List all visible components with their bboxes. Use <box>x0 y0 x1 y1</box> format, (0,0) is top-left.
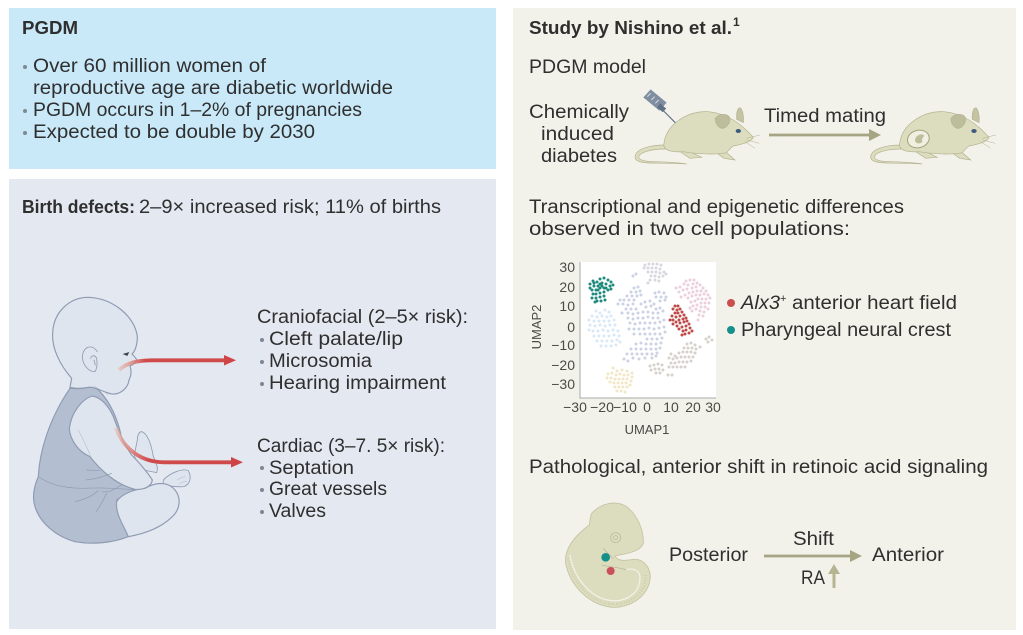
label: chemically induced diabetes: Chemically <box>529 102 630 123</box>
cluster: red <box>670 306 692 335</box>
heading: birth defects risk <box>22 197 441 218</box>
label: timed mating: Timed mating <box>764 106 886 127</box>
arrow: RA up <box>828 564 840 588</box>
icon: syringe <box>643 89 679 127</box>
bullet list: PGDM facts: reproductive age are diabetic worldwide <box>33 78 393 99</box>
axis labels: 0 <box>643 399 651 415</box>
axis labels: −20 <box>551 357 575 373</box>
label: anterior: Anterior <box>872 545 945 566</box>
panel: PGDM <box>9 8 496 169</box>
axis labels: −10 <box>551 337 575 353</box>
chart: UMAP scatter <box>529 259 721 437</box>
axis labels: 10 <box>559 298 575 314</box>
legend: cell populations: Alx3 <box>740 293 780 314</box>
axis labels: 0 <box>567 319 575 335</box>
axis labels: UMAP2 <box>529 305 544 349</box>
cluster: top grey <box>644 264 666 283</box>
text block: craniofacial risks: Microsomia <box>269 351 372 372</box>
legend: cell populations: anterior heart field <box>792 293 957 314</box>
text block: transcriptional differences: Transcriptional and epigenetic differences <box>529 197 904 218</box>
cluster: light blue <box>589 310 620 346</box>
label: shift: Shift <box>793 529 835 550</box>
arrow: heart to cardiac <box>116 428 243 468</box>
axis labels: 20 <box>685 399 701 415</box>
legend: cell populations: + <box>780 293 786 305</box>
text block: craniofacial risks: Hearing impairment <box>269 373 447 394</box>
axis labels: −30 <box>551 376 575 392</box>
illustration: pregnant mouse <box>871 108 996 164</box>
panel: study <box>513 8 1016 630</box>
axis labels: 10 <box>663 399 679 415</box>
arrow: posterior to anterior <box>764 550 862 562</box>
text block: cardiac risks: Great vessels <box>269 479 387 500</box>
axis labels: 30 <box>559 259 575 275</box>
label: posterior: Posterior <box>669 545 749 566</box>
bullet list: PGDM facts <box>23 56 393 143</box>
axis labels: 30 <box>705 399 721 415</box>
heading: birth defects risk: 2–9× increased risk; 11% of births <box>139 197 441 218</box>
heading: birth defects risk: Birth defects: <box>22 197 135 217</box>
subheading: PDGM model: PDGM model <box>529 57 646 78</box>
heading: PGDM: PGDM <box>22 18 78 38</box>
label: chemically induced diabetes: diabetes <box>541 146 617 167</box>
panel: birth defects <box>9 179 496 629</box>
axis labels: UMAP1 <box>625 422 669 437</box>
illustration: mouse with diabetes <box>635 108 760 164</box>
arrow: timed mating <box>769 129 881 141</box>
cluster: blue-grey <box>618 274 666 361</box>
bullet list: PGDM facts: Expected to be double by 2030 <box>33 122 315 143</box>
axis labels: 20 <box>559 279 575 295</box>
illustration: seated baby <box>33 297 190 543</box>
heading: study by Nishino: Study by Nishino et al. <box>529 17 732 38</box>
bullet list: PGDM facts: Over 60 million women of <box>33 56 267 77</box>
cluster: taupe <box>650 337 712 375</box>
text block: cardiac risks: Cardiac (3–7. 5× risk): <box>257 436 445 457</box>
heading: study by Nishino: 1 <box>733 15 740 29</box>
text block: cardiac risks <box>257 436 445 522</box>
text block: craniofacial risks: Cleft palate/lip <box>269 329 403 350</box>
label: chemically induced diabetes: induced <box>541 124 614 145</box>
bullet list: PGDM facts: PGDM occurs in 1–2% of pregnancies <box>33 100 362 121</box>
text block: retinoic acid shift: Pathological, anterior shift in retinoic acid signaling <box>529 457 988 478</box>
arrow: face to craniofacial <box>119 355 236 370</box>
cluster: pink <box>676 280 710 320</box>
axis labels: −20 <box>590 399 614 415</box>
axis labels: −10 <box>613 399 637 415</box>
illustration: embryo <box>565 503 650 607</box>
text block: transcriptional differences <box>529 197 904 240</box>
text block: transcriptional differences: observed in two cell populations: <box>529 219 850 240</box>
axis labels: −30 <box>563 399 587 415</box>
cluster: teal <box>590 278 613 302</box>
label: chemically induced diabetes <box>529 102 630 167</box>
legend: cell populations <box>727 293 957 341</box>
cluster: beige <box>607 368 632 392</box>
text block: craniofacial risks: Craniofacial (2–5× risk): <box>257 307 468 328</box>
text block: cardiac risks: Valves <box>269 501 326 522</box>
axis labels <box>529 259 721 437</box>
text block: cardiac risks: Septation <box>269 458 354 479</box>
text block: craniofacial risks <box>257 307 468 394</box>
legend: cell populations: Pharyngeal neural crest <box>741 320 952 341</box>
label: RA: RA <box>801 568 825 589</box>
